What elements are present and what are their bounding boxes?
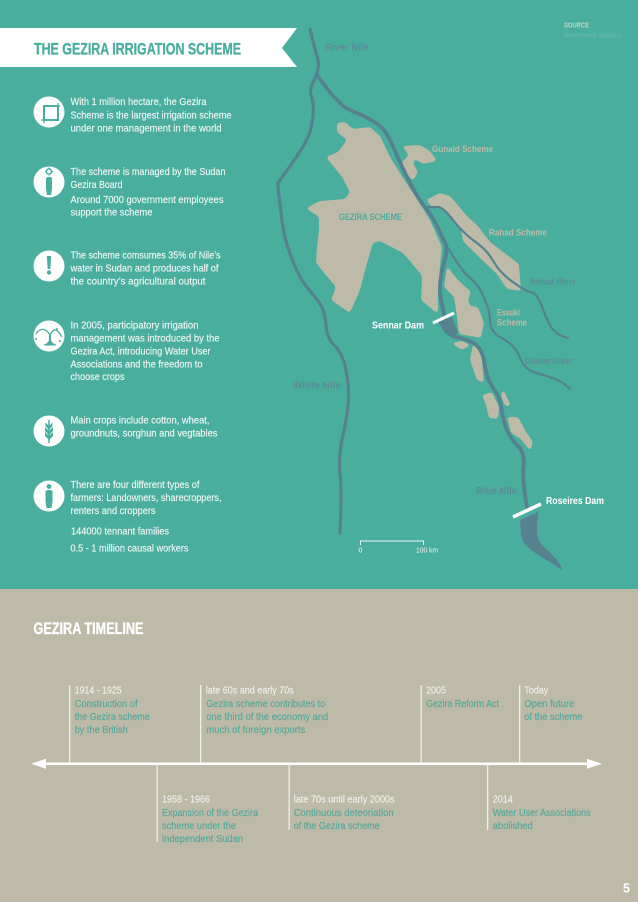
event: 2005: 2005: [426, 685, 446, 697]
source note: [564, 22, 621, 40]
icon: exclamation mark: [34, 250, 64, 282]
event: 1914 - 1925: by the British: [75, 724, 128, 736]
map labels: Gunaid Scheme: [432, 144, 493, 155]
event: 2014: abolished: [493, 820, 533, 832]
event: late 70s until early 2000s: [288, 764, 395, 832]
map labels: [293, 42, 604, 507]
text: participatory management: In 2005, participatory irrigation: [70, 320, 199, 332]
event: 1914 - 1925: [69, 685, 150, 763]
text: farmers: [70, 479, 222, 555]
event: today: [519, 685, 582, 763]
event: late 60s and early 70s: [200, 685, 328, 763]
map labels: Dinder River: [525, 356, 573, 367]
map labels: Roseires Dam: [546, 495, 604, 507]
map of the irrigation schemes: [278, 29, 604, 570]
text: main crops: groundnuts, sorghun and vegtables: [70, 428, 218, 440]
page number: 5: [623, 881, 630, 895]
event: 2014: Water User Associations: [493, 807, 591, 819]
text: participatory management: Associations and the freedom to: [70, 358, 203, 370]
source note: Government statistics: [564, 32, 621, 40]
panel: key facts: [34, 96, 232, 555]
event: late 60s and early 70s: much of foreign exports: [206, 724, 305, 736]
event: late 70s until early 2000s: Continuous deteoriation: [294, 807, 394, 819]
text: participatory management: management was introduced by the: [70, 332, 220, 344]
event: 2014: [487, 764, 591, 832]
text: farmers: renters and croppers: [70, 505, 156, 517]
text: main crops: [70, 415, 218, 440]
event: today: Today: [524, 685, 549, 697]
event: 1958 - 1966: independent Sudan: [162, 833, 243, 845]
timeline heading: GEZIRA TIMELINE: [34, 620, 144, 638]
text: size of scheme: [70, 96, 232, 134]
event: today: of the scheme: [524, 711, 582, 723]
event: late 70s until early 2000s: of the Gezira scheme: [294, 820, 380, 832]
text: management: [70, 166, 226, 218]
text: management: Gezira Board: [70, 179, 123, 191]
scheme area: Gunaid: [402, 145, 437, 181]
event: 1914 - 1925: the Gezira scheme: [75, 711, 150, 723]
scale bar: [358, 541, 438, 555]
event: 2005: [420, 685, 499, 763]
text: water use: water in Sudan and produces half of: [70, 262, 219, 274]
map labels: White Nile: [293, 380, 341, 392]
icon: fountain: [34, 320, 64, 352]
text: water use: the country’s agricultural output: [70, 276, 206, 288]
title banner: [0, 28, 297, 67]
icon: area square: [34, 96, 64, 128]
text: water use: [70, 250, 220, 288]
event: 2014: 2014: [493, 793, 513, 805]
text: management: The scheme is managed by the Sudan: [70, 166, 226, 178]
event: 1958 - 1966: scheme under the: [162, 820, 236, 832]
text: farmers: There are four different types of: [70, 479, 200, 491]
text: participatory management: Gezira Act, introducing Water User: [70, 346, 211, 358]
map labels: Scheme: [497, 317, 527, 328]
text: participatory management: choose crops: [70, 371, 124, 383]
map labels: Sennar Dam: [372, 320, 424, 332]
timeline: [31, 685, 602, 845]
text: main crops: Main crops include cotton, wheat,: [70, 415, 210, 427]
text: size of scheme: under one management in the world: [70, 122, 222, 134]
event: 1914 - 1925: 1914 - 1925: [75, 685, 122, 697]
text: farmers: 0.5 - 1 million causal workers: [70, 543, 188, 555]
event: 1958 - 1966: Expansion of the Gezira: [162, 807, 258, 819]
map labels: Blue Nile: [476, 485, 517, 497]
scheme area: Rahad: [426, 193, 521, 291]
map labels: Rahad Scheme: [489, 228, 547, 239]
text: participatory management: [70, 320, 220, 383]
text: management: support the scheme: [70, 206, 153, 218]
scheme area: Essuki and southern plots: [444, 266, 533, 451]
text: management: Around 7000 government employees: [70, 194, 224, 206]
event: 1914 - 1925: Construction of: [75, 698, 138, 710]
event: 1958 - 1966: 1958 - 1966: [162, 793, 210, 805]
icon: manager with gear: [34, 166, 64, 198]
text: farmers: farmers: Landowners, sharecroppers,: [70, 492, 222, 504]
scheme area: Gezira: [306, 122, 442, 314]
event: today: Open future: [524, 698, 574, 710]
text: size of scheme: With 1 million hectare, the Gezira: [70, 96, 207, 108]
source note: SOURCE: [564, 22, 589, 30]
river: Nile, White Nile and Blue Nile: [278, 29, 570, 533]
dam: Sennar: [433, 313, 454, 323]
text: size of scheme: Scheme is the largest irrigation scheme: [70, 109, 232, 121]
reservoir: Sennar: [438, 317, 458, 338]
scale bar: 100 km: [416, 548, 438, 555]
map labels: River Nile: [325, 42, 369, 54]
map labels: Rahad River: [530, 277, 576, 288]
event: late 60s and early 70s: one third of the economy and: [206, 711, 328, 723]
event: late 60s and early 70s: Gezira scheme contributes to: [206, 698, 325, 710]
text: water use: The scheme comsumes 35% of Nile’s: [70, 250, 220, 262]
dam: Roseires: [513, 504, 541, 517]
map labels: Essuki: [497, 308, 520, 319]
map labels: GEZIRA SCHEME: [339, 212, 402, 223]
event: 2005: Gezira Reform Act: [426, 698, 499, 710]
icon: farmer: [34, 480, 64, 512]
reservoir: Roseires: [520, 512, 562, 570]
arrow axis: [31, 759, 602, 769]
event: 1958 - 1966: [156, 764, 258, 845]
event: late 70s until early 2000s: late 70s until early 2000s: [294, 793, 395, 805]
scale bar: 0: [358, 548, 362, 555]
event: late 60s and early 70s: late 60s and early 70s: [206, 685, 294, 697]
icon: wheat: [34, 416, 64, 446]
text: farmers: 144000 tennant families: [71, 526, 169, 538]
title banner: THE GEZIRA IRRIGATION SCHEME: [34, 40, 241, 58]
